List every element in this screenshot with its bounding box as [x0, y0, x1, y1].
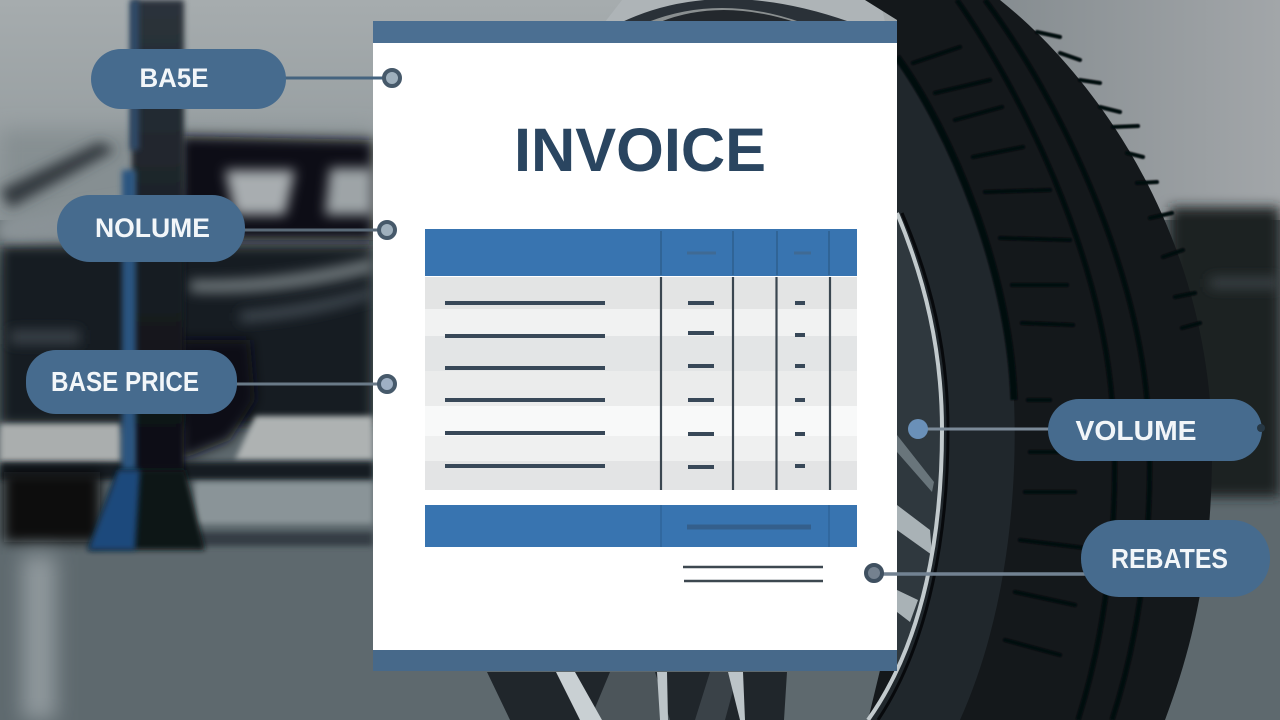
floor bands [0, 340, 373, 720]
tread [865, 0, 1212, 720]
callout: BASE PRICE: BASE PRICE [51, 366, 199, 397]
tread sipes [913, 32, 1200, 655]
blurred car, left [0, 130, 373, 425]
spokes [897, 435, 934, 622]
wheel interior [897, 213, 942, 665]
callout: REBATES: REBATES [1111, 543, 1228, 574]
callout: BA5E [91, 49, 400, 109]
blurred blue lift column [88, 0, 205, 550]
lower wheel below page [487, 672, 787, 720]
top band [373, 21, 897, 43]
sidewall [868, 57, 1015, 720]
invoice page [373, 21, 897, 671]
table header [425, 229, 857, 276]
blurred right background [1170, 207, 1280, 497]
signature lines [683, 567, 823, 581]
callout: VOLUME: VOLUME [1076, 415, 1196, 446]
callout: BASE PRICE [26, 350, 395, 414]
circumferential grooves [897, 0, 1150, 720]
title: INVOICE [514, 116, 766, 184]
callout: NOLUME [57, 195, 395, 262]
callout: VOLUME [908, 399, 1265, 461]
callout: REBATES [866, 520, 1270, 597]
tire [487, 0, 1212, 720]
table [425, 229, 857, 490]
callout: NOLUME: NOLUME [95, 213, 210, 243]
bottom band [373, 650, 897, 671]
silver rim line [868, 213, 942, 720]
total bar [425, 505, 857, 547]
row lines [445, 303, 805, 467]
wheel arcs above page [605, 0, 885, 22]
callout: BA5E: BA5E [140, 63, 208, 93]
